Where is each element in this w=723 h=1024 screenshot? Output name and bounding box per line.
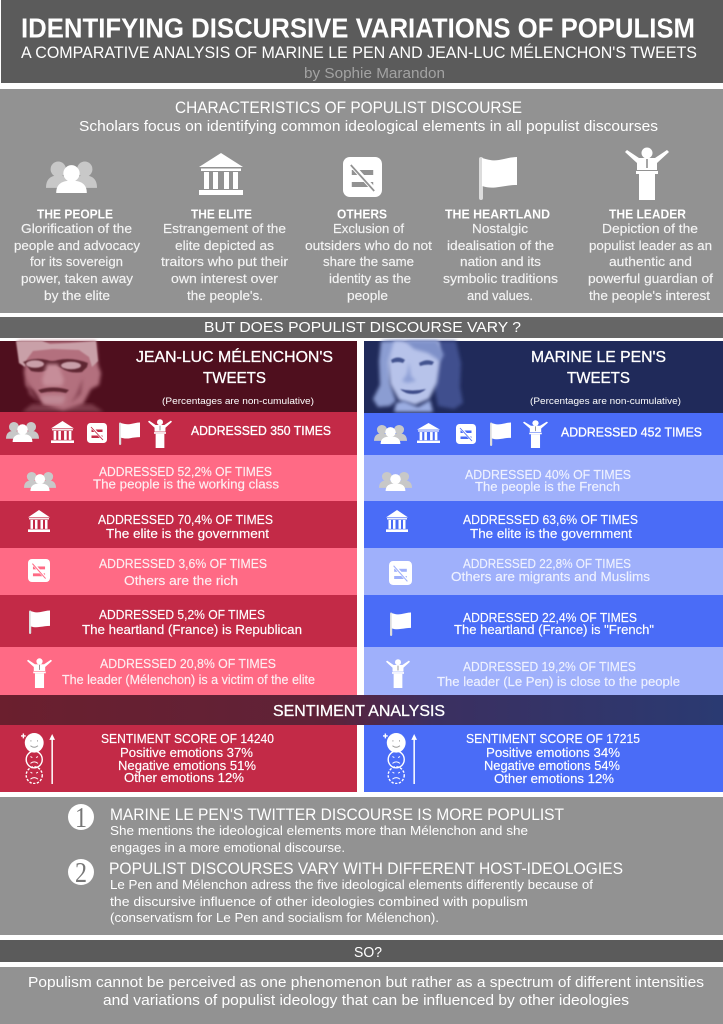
note: (Percentages are non-cumulative) [530, 396, 681, 407]
row: the elite: The elite is the government [470, 527, 633, 541]
column: the elite: own interest over [171, 271, 279, 286]
sentiment figures: Positive emotions 34% [486, 746, 620, 760]
row: the people: The people is the French [475, 480, 620, 494]
header panel [1, 0, 723, 83]
column: the heartland [443, 206, 559, 303]
Le Pen header: TWEETS [567, 370, 630, 387]
portrait: Le Pen [373, 341, 463, 412]
sentiment figures: SENTIMENT SCORE OF 14240 [101, 732, 274, 746]
row: addressed 350 times: ADDRESSED 350 TIMES [191, 424, 331, 438]
subtitle: A COMPARATIVE ANALYSIS OF MARINE LE PEN AND JEAN-LUC MÉLENCHON'S TWEETS [21, 43, 697, 62]
column: others [305, 206, 432, 303]
column: the heartland: Nostalgic [472, 221, 529, 236]
column: the heartland: nation and its [460, 254, 542, 269]
row: the heartland: The heartland (France) is "French" [454, 623, 654, 637]
row: the leader: The leader (Mélenchon) is a victim of the elite [62, 673, 315, 687]
icon: the elite [199, 153, 243, 195]
section bar: sentiment analysis [0, 695, 723, 725]
row: addressed 452 times: ADDRESSED 452 TIMES [561, 426, 702, 440]
column: others: outsiders who do not [305, 238, 432, 253]
row: the heartland [364, 595, 723, 647]
finding 1: MARINE LE PEN'S TWITTER DISCOURSE IS MORE POPULIST [110, 806, 564, 824]
row: the elite: The elite is the government [106, 527, 270, 541]
icon: emotion scale [383, 733, 417, 784]
column: the people: power, taken away [21, 271, 134, 286]
row: the heartland: The heartland (France) is Republican [82, 623, 302, 637]
column: the people: THE PEOPLE [37, 206, 113, 222]
column: others: OTHERS [337, 206, 387, 222]
finding 1: 1 [75, 803, 87, 834]
column: the people: for its sovereign [30, 254, 123, 269]
panel: Le Pen sentiment [364, 725, 723, 792]
panel: Mélenchon tweets [0, 341, 357, 695]
column: the elite: THE ELITE [191, 206, 252, 222]
icon: the leader [625, 148, 669, 200]
finding 1: engages in a more emotional discourse. [110, 841, 345, 855]
icon: the people [46, 162, 97, 193]
column: the leader [588, 206, 713, 303]
sentiment figures [101, 732, 274, 785]
column: others: share the same [323, 254, 414, 269]
column: the leader: THE LEADER [609, 206, 687, 222]
panel: findings [0, 797, 723, 935]
column: the heartland: and values. [467, 288, 533, 303]
column: the leader: the people's interest [589, 288, 710, 303]
column: the elite [161, 206, 289, 303]
section bar: but does populist discourse vary: BUT DOES POPULIST DISCOURSE VARY ? [204, 320, 521, 336]
panel: conclusion: and variations of populist ideology that can be influenced by other ideologies [103, 993, 629, 1009]
portrait: Mélenchon [16, 341, 104, 412]
icon: emotion scale [21, 733, 55, 784]
sentiment figures: Negative emotions 51% [118, 759, 256, 773]
heading: Jean-Luc Mélenchon's tweets: JEAN-LUC MÉLENCHON'S [136, 349, 333, 366]
sentiment figures [466, 732, 640, 786]
sentiment figures: SENTIMENT SCORE OF 17215 [466, 732, 640, 746]
row: the people: ADDRESSED 52,2% OF TIMES [99, 465, 272, 479]
column: the elite: Estrangement of the [163, 221, 286, 236]
section bar: sentiment analysis: SENTIMENT ANALYSIS [273, 703, 445, 720]
row: the people [364, 455, 723, 501]
row: the leader [364, 647, 723, 695]
row: others: Others are the rich [124, 574, 238, 588]
Le Pen header [364, 341, 723, 413]
row: the heartland: ADDRESSED 5,2% OF TIMES [99, 608, 265, 622]
title: IDENTIFYING DISCURSIVE VARIATIONS OF POPULISM [21, 12, 695, 44]
section bar: so: SO? [354, 945, 382, 961]
row: the leader [0, 647, 357, 695]
row: the heartland [0, 595, 357, 647]
row: the heartland: ADDRESSED 22,4% OF TIMES [463, 611, 637, 625]
column: the leader: authentic and [609, 254, 692, 269]
sentiment figures: Other emotions 12% [124, 771, 244, 785]
finding 2: (conservatism for Le Pen and socialism for Mélenchon). [110, 911, 439, 925]
panel: conclusion: Populism cannot be perceived as one phenomenon but rather as a spectrum of different intensities [28, 975, 704, 991]
column: the leader: powerful guardian of [588, 271, 713, 286]
row: the people [0, 455, 357, 501]
row: the people: The people is the working class [93, 478, 279, 492]
panel: characteristics of populist discourse [0, 89, 723, 313]
row: the elite: ADDRESSED 63,6% OF TIMES [463, 513, 638, 527]
finding 2: the discursive influence of other ideologies combined with populism [110, 895, 528, 909]
row: the elite: ADDRESSED 70,4% OF TIMES [98, 513, 273, 527]
column: the heartland: symbolic traditions [443, 271, 559, 286]
finding 2 [68, 858, 623, 925]
row: the elite [364, 501, 723, 548]
column: the leader: Depiction of the [602, 221, 698, 236]
heading: characteristics: CHARACTERISTICS OF POPULIST DISCOURSE [175, 99, 522, 117]
row: addressed 350 times [0, 412, 357, 455]
Mélenchon header: TWEETS [203, 370, 266, 387]
sentiment figures: Positive emotions 37% [120, 746, 253, 760]
Mélenchon header [0, 341, 357, 412]
column: the people: Glorification of the [21, 221, 132, 236]
note: (Percentages are non-cumulative) [162, 396, 314, 407]
panel: conclusion [0, 967, 723, 1024]
row: the leader: ADDRESSED 19,2% OF TIMES [463, 660, 636, 674]
column: the elite: elite depicted as [175, 238, 275, 253]
row: addressed 452 times [364, 413, 723, 455]
row: others [0, 548, 357, 595]
panel: Mélenchon sentiment [0, 725, 357, 792]
icon: the heartland flag [479, 157, 517, 200]
column: the leader: populist leader as an [589, 238, 712, 253]
row: the leader: The leader (Le Pen) is close to the people [437, 675, 680, 689]
column: the people [14, 206, 141, 303]
column: the elite: traitors who put their [161, 254, 289, 269]
column: the heartland: idealisation of the [447, 238, 554, 253]
row: others: ADDRESSED 3,6% OF TIMES [99, 557, 267, 571]
panel: Le Pen tweets [364, 341, 723, 695]
author: by Sophie Marandon [304, 66, 445, 82]
intro line: Scholars focus on identifying common ideological elements in all populist discourses [79, 119, 658, 135]
heading: Marine Le Pen's tweets: MARINE LE PEN'S [531, 349, 666, 366]
column: others: identity as the [329, 271, 411, 286]
column: the people: by the elite [44, 288, 110, 303]
section bar: but does populist discourse vary [0, 317, 723, 338]
finding 2: Le Pen and Mélenchon adress the five ideological elements differently because of [110, 878, 594, 892]
finding 1 [68, 803, 564, 855]
row: others: Others are migrants and Muslims [451, 570, 650, 584]
row: others [364, 548, 723, 595]
finding 1: She mentions the ideological elements more than Mélenchon and she [110, 824, 528, 838]
row: others: ADDRESSED 22,8% OF TIMES [463, 557, 631, 571]
row: the leader: ADDRESSED 20,8% OF TIMES [100, 657, 276, 671]
icon: others [343, 157, 382, 197]
finding 2: 2 [75, 858, 87, 889]
sentiment figures: Other emotions 12% [494, 772, 614, 786]
column: the heartland: THE HEARTLAND [445, 206, 550, 222]
row: the people: ADDRESSED 40% OF TIMES [465, 468, 631, 482]
sentiment figures: Negative emotions 54% [484, 759, 620, 773]
column: the people: people and advocacy [14, 238, 141, 253]
column: the elite: the people's. [187, 288, 263, 303]
row: the elite [0, 501, 357, 548]
section bar: so [0, 940, 723, 962]
finding 2: POPULIST DISCOURSES VARY WITH DIFFERENT HOST-IDEOLOGIES [109, 860, 623, 878]
column: others: people [347, 288, 388, 303]
column: others: Exclusion of [333, 221, 404, 236]
